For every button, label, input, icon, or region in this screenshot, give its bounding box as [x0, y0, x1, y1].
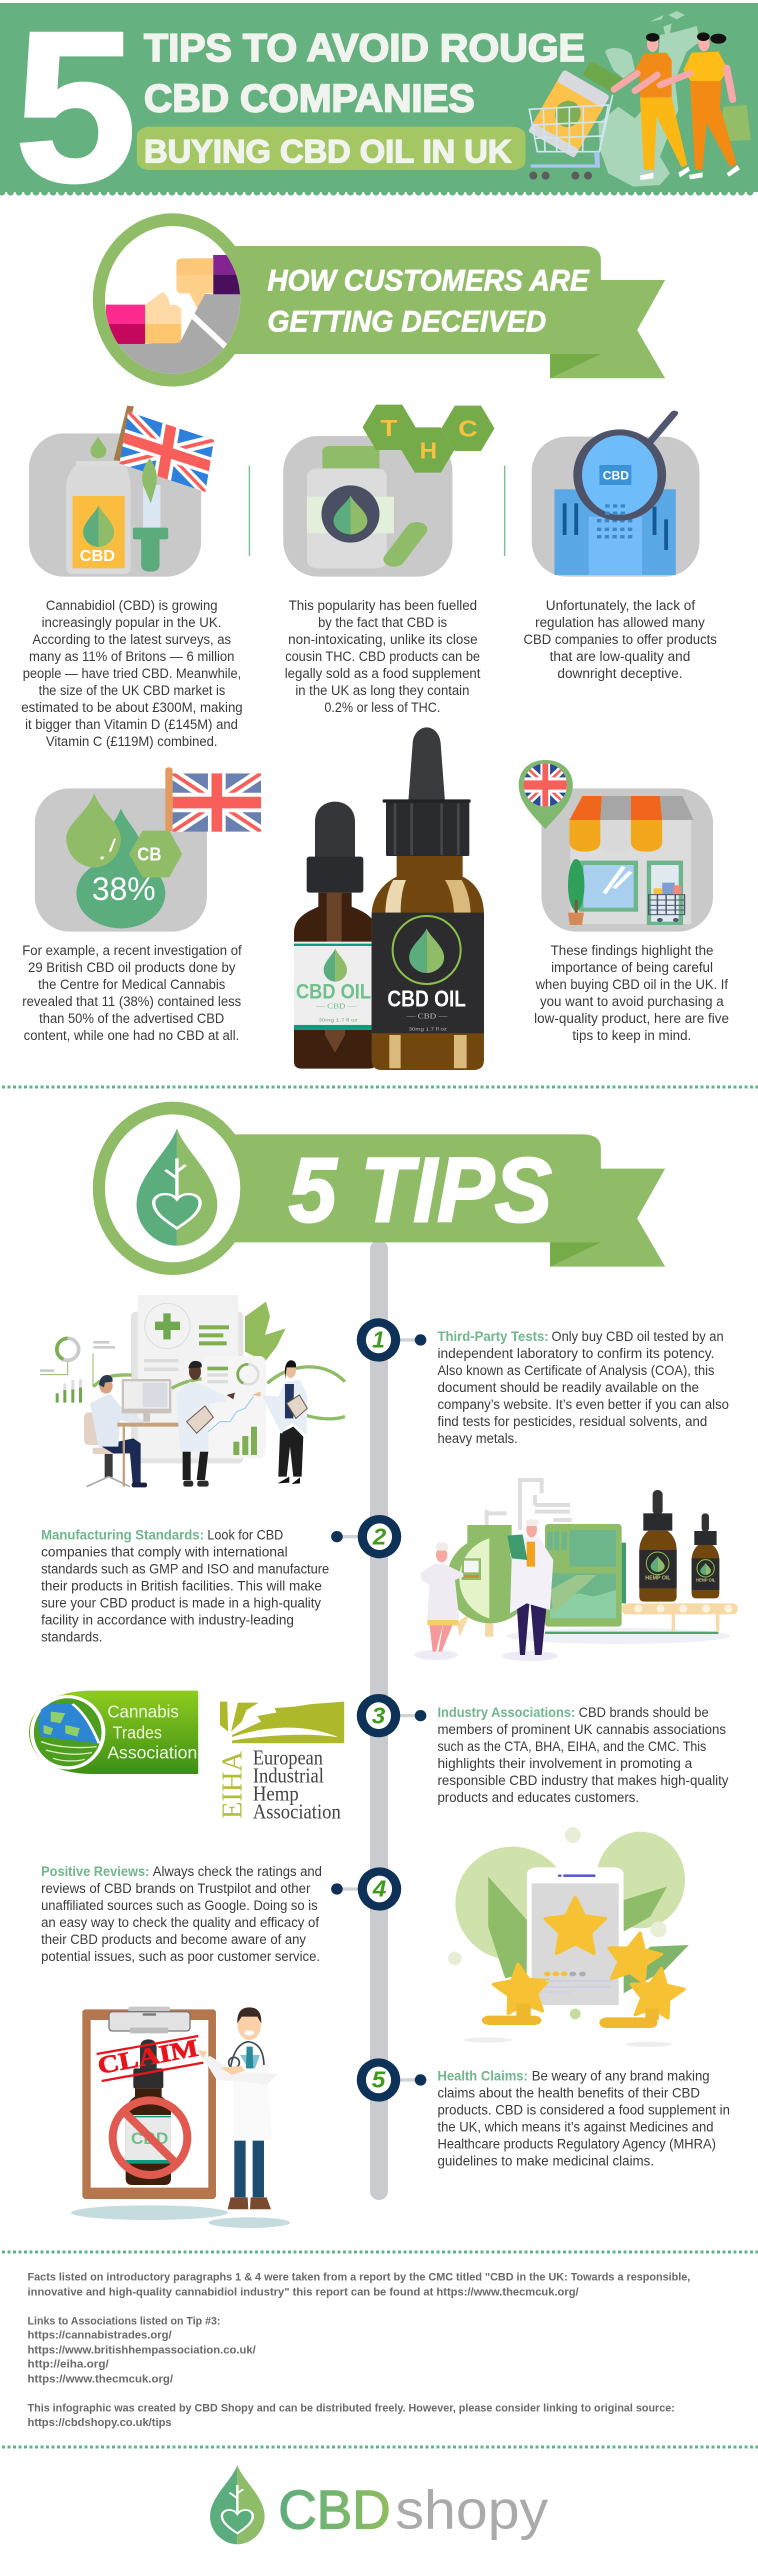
tip 4 text — [41, 1864, 322, 1964]
tip 2 text: Manufacturing Standards: — [41, 1527, 204, 1543]
logo: Cannabis Trades Association: Trades — [113, 1722, 162, 1742]
panel: shop front with UK pin — [519, 760, 713, 932]
footer notes: http://eiha.org/ — [28, 2358, 109, 2370]
text block: lack of regulation — [524, 598, 717, 681]
panel: magnifier over CBD building — [532, 413, 699, 577]
footer notes: Links to Associations listed on Tip #3: — [28, 2315, 220, 2327]
dotted divider — [2, 2446, 758, 2448]
logo: European Industrial Hemp Association: Industrial — [253, 1764, 324, 1787]
tips 2 and 3 — [29, 1515, 729, 1823]
text block: popularity: cousin THC. CBD products can be — [285, 649, 480, 664]
text block: cannabidiol intro: it bigger than Vitamin D (£145M) and — [25, 717, 238, 732]
text block: popularity — [285, 598, 481, 715]
small bottle: — CBD — — [315, 1002, 357, 1011]
hemp oil bottles — [639, 1490, 719, 1602]
tip 3 text: Industry Associations: — [437, 1705, 575, 1720]
header band — [0, 3, 758, 192]
node 4 — [331, 1867, 401, 1911]
hemp oil bottles: HEMP OIL — [696, 1577, 715, 1582]
title — [15, 0, 585, 227]
panel: THC jar and hexagons: T — [380, 416, 398, 442]
text block: popularity: 0.2% or less of THC. — [324, 700, 440, 715]
footer notes: https://www.thecmcuk.org/ — [28, 2373, 173, 2385]
subtitle pill — [137, 127, 525, 170]
emblem with leaf drop and heart — [93, 1102, 252, 1275]
small bottle — [294, 802, 377, 1069]
scientist with tablet — [252, 1360, 307, 1484]
divider — [248, 466, 251, 556]
tip 5 text: Health Claims: — [437, 2069, 528, 2084]
intro row: three panels — [21, 405, 717, 749]
subtitle pill: BUYING CBD OIL IN UK — [144, 134, 512, 170]
text block: cannabidiol intro: the size of the UK CBD market is — [39, 683, 225, 698]
large bottle: 30mg 1.7 fl oz — [409, 1027, 448, 1032]
panel: 38 percent drops and flag: 38% — [92, 872, 156, 907]
footer notes: https://cbdshopy.co.uk/tips — [28, 2416, 172, 2428]
panel: CBD jar and UK flag: CBD — [80, 547, 115, 565]
panel: magnifier over CBD building: CBD — [603, 469, 629, 483]
ribbon heading: HOW CUSTOMERS ARE — [267, 264, 590, 297]
section banner: how customers are getting deceived — [93, 213, 665, 400]
text block: popularity: in the UK as long they contain — [295, 683, 469, 698]
hemp oil bottles: HEMP OIL — [645, 1575, 671, 1581]
small bottle: CBD OIL — [296, 979, 371, 1003]
logo: Cannabis Trades Association: Association — [107, 1742, 197, 1762]
tip 2 text — [41, 1527, 329, 1645]
node 2: 2 — [372, 1524, 386, 1550]
tip 1 text — [437, 1329, 729, 1446]
desk and monitor — [117, 1379, 182, 1487]
CBD oil bottles — [294, 727, 484, 1070]
prohibition sign — [113, 2100, 187, 2175]
node 4: 4 — [372, 1877, 386, 1902]
text block: cannabidiol intro: Cannabidiol (CBD) is growing — [46, 598, 218, 613]
text block: cannabidiol intro: many as 11% of Britons — 6 million — [29, 649, 234, 664]
logo: CBD shopy: CBD — [278, 2479, 391, 2540]
conveyor — [622, 1603, 738, 1631]
text block: cannabidiol intro: According to the latest surveys, as — [32, 632, 231, 647]
large bottle — [372, 727, 484, 1070]
tip 5 illustration: clipboard claim and doctor — [71, 2007, 290, 2228]
text block: lack of regulation: downright deceptive. — [557, 666, 683, 681]
tip 4 text: Positive Reviews: — [41, 1864, 149, 1879]
section banner: 5 tips — [93, 1102, 665, 1275]
title line 2: CBD COMPANIES — [144, 77, 475, 120]
text block: cannabidiol intro: increasingly popular in the UK. — [42, 615, 221, 630]
ribbon heading — [267, 264, 590, 338]
clipboard — [82, 2007, 216, 2199]
worker left — [414, 1543, 463, 1660]
logo: European Industrial Hemp Association — [220, 1702, 344, 1823]
ribbon heading: 5 TIPS — [289, 1140, 552, 1242]
text block: popularity: legally sold as a food supplement — [285, 666, 481, 681]
text block: cannabidiol intro: estimated to be about £300M, making — [21, 700, 243, 715]
seated scientist — [84, 1375, 147, 1487]
ribbon heading: GETTING DECEIVED — [267, 305, 546, 338]
tip 3 text — [437, 1705, 729, 1805]
text block: investigation: For example, a recent investigation of — [22, 943, 242, 958]
tip 1 text: heavy metals. — [437, 1431, 518, 1446]
text block: cannabidiol intro — [21, 598, 243, 749]
text block: investigation — [22, 943, 242, 1043]
divider — [503, 466, 506, 556]
logo: CBD shopy: shopy — [395, 2479, 549, 2540]
text block: investigation: 29 British CBD oil products done by — [28, 960, 236, 975]
tip 2 text: standards. — [41, 1629, 102, 1645]
intro row 2 — [22, 760, 729, 1043]
tip 4 text: reviews of CBD brands on Trustpilot and other — [41, 1881, 311, 1896]
text block: popularity: by the fact that CBD is — [318, 615, 447, 630]
text block: investigation: content, while one had no CBD at all. — [24, 1028, 239, 1043]
tip 2 text: sure your CBD product is made in a high-quality — [41, 1595, 321, 1611]
panel: THC jar and hexagons: C — [458, 417, 478, 442]
EIHA vertical letters: EIHA — [218, 1750, 249, 1819]
woman — [660, 32, 751, 179]
shopping cart — [529, 95, 613, 152]
tank — [447, 1525, 533, 1637]
text block: findings: tips to keep in mind. — [572, 1028, 691, 1043]
doctor with clipboard — [177, 1361, 235, 1487]
ribbon fold — [550, 1242, 601, 1267]
text block: lack of regulation: that are low-quality and — [550, 649, 690, 664]
tip 4 text: Always check the ratings and — [153, 1864, 322, 1879]
tip 1 — [357, 1318, 729, 1446]
panel: CBD jar and UK flag — [29, 406, 214, 577]
tip 1 text: Third-Party Tests: — [437, 1329, 549, 1344]
text block: cannabidiol intro: people — have tried CBD. Meanwhile, — [23, 666, 241, 681]
node 5: 5 — [372, 2068, 386, 2093]
large bottle: — CBD — — [405, 1011, 448, 1020]
text block: popularity: This popularity has been fuelled — [289, 598, 477, 613]
machine — [545, 1524, 718, 1634]
text block: findings — [534, 943, 729, 1043]
tip 4 text: an easy way to check the quality and efficacy of — [41, 1915, 319, 1930]
tip 2 text: companies that comply with international — [41, 1544, 288, 1560]
node 3 — [357, 1694, 426, 1737]
node 1: 1 — [372, 1328, 385, 1353]
footer notes — [28, 2271, 690, 2428]
worker centre with clipboard — [502, 1519, 558, 1661]
text block: popularity: non-intoxicating, unlike its close — [288, 632, 478, 647]
tip 2 text: Look for CBD — [207, 1527, 283, 1543]
panel: THC jar and hexagons — [283, 405, 495, 577]
tip 5 text: guidelines to make medicinal claims. — [437, 2154, 654, 2169]
panel: THC jar and hexagons: H — [420, 439, 437, 464]
bottle — [126, 2039, 171, 2185]
tip 2 illustration: CBD manufacturing line — [414, 1480, 738, 1661]
panel: 38 percent drops and flag: CB — [137, 844, 161, 865]
node 5 — [357, 2058, 426, 2102]
tip 4 illustration: phone with star ratings — [448, 1827, 689, 2047]
logo: Cannabis Trades Association: Cannabis — [107, 1701, 179, 1721]
footer notes: https://cannabistrades.org/ — [28, 2329, 172, 2341]
text block: lack of regulation: Unfortunately, the lack of — [546, 598, 695, 613]
dotted divider — [2, 2250, 758, 2254]
tip 2 text: standards such as GMP and ISO and manufacture — [41, 1561, 329, 1577]
ribbon — [232, 1134, 665, 1267]
tip 4 text: their CBD products and become aware of any — [41, 1932, 306, 1947]
text block: investigation: revealed that 11 (38%) contained less — [22, 994, 241, 1009]
small bottle: 30mg 1.7 fl oz — [318, 1018, 359, 1023]
tip 2 text: facility in accordance with industry-leading — [41, 1612, 294, 1628]
header illustration: shoppers, cart and UK map — [528, 11, 751, 187]
ribbon — [232, 246, 665, 378]
logo: Cannabis Trades Association — [29, 1691, 198, 1774]
tip 4 text: potential issues, such as poor customer service. — [41, 1949, 320, 1964]
node 1 — [357, 1318, 426, 1362]
logo: European Industrial Hemp Association: Hemp — [253, 1782, 299, 1805]
logo: European Industrial Hemp Association: European — [253, 1746, 323, 1769]
footer notes: https://www.britishhempassociation.co.uk/ — [28, 2344, 256, 2356]
text block: investigation: the Centre for Medical Cannabis — [38, 977, 225, 992]
panel: 38 percent drops and flag — [35, 767, 261, 932]
tips 4 and 5 — [41, 1827, 730, 2169]
dotted divider — [2, 1086, 758, 1088]
doctor — [197, 2007, 278, 2209]
tip 3 text: products and educates customers. — [437, 1790, 639, 1805]
large bottle: CBD OIL — [387, 986, 466, 1012]
timeline bar — [370, 1240, 388, 2200]
node 2 — [331, 1515, 401, 1558]
text block: cannabidiol intro: Vitamin C (£119M) combined. — [46, 734, 218, 749]
chart line — [208, 1397, 253, 1432]
map of UK — [598, 11, 700, 187]
text block: investigation: than 50% of the advertised CBD — [39, 1011, 224, 1026]
tip 1 illustration: laboratory team — [40, 1295, 345, 1487]
tip 2 text: their products in British facilities. This will make — [41, 1578, 322, 1594]
tip 5 text — [437, 2069, 730, 2169]
claim stamp: CLAIM — [96, 2035, 200, 2080]
emblem ring with thumbs icon — [92, 213, 240, 387]
ribbon fold — [550, 354, 601, 378]
tip 4 text: unaffiliated sources such as Google. Doing so is — [41, 1898, 318, 1913]
bottle: CBD — [131, 2129, 168, 2148]
node 3: 3 — [372, 1703, 385, 1729]
logo: European Industrial Hemp Association: Association — [253, 1800, 341, 1823]
man — [614, 33, 690, 180]
logo: CBD shopy — [210, 2465, 549, 2544]
bottle in cart — [528, 51, 624, 160]
